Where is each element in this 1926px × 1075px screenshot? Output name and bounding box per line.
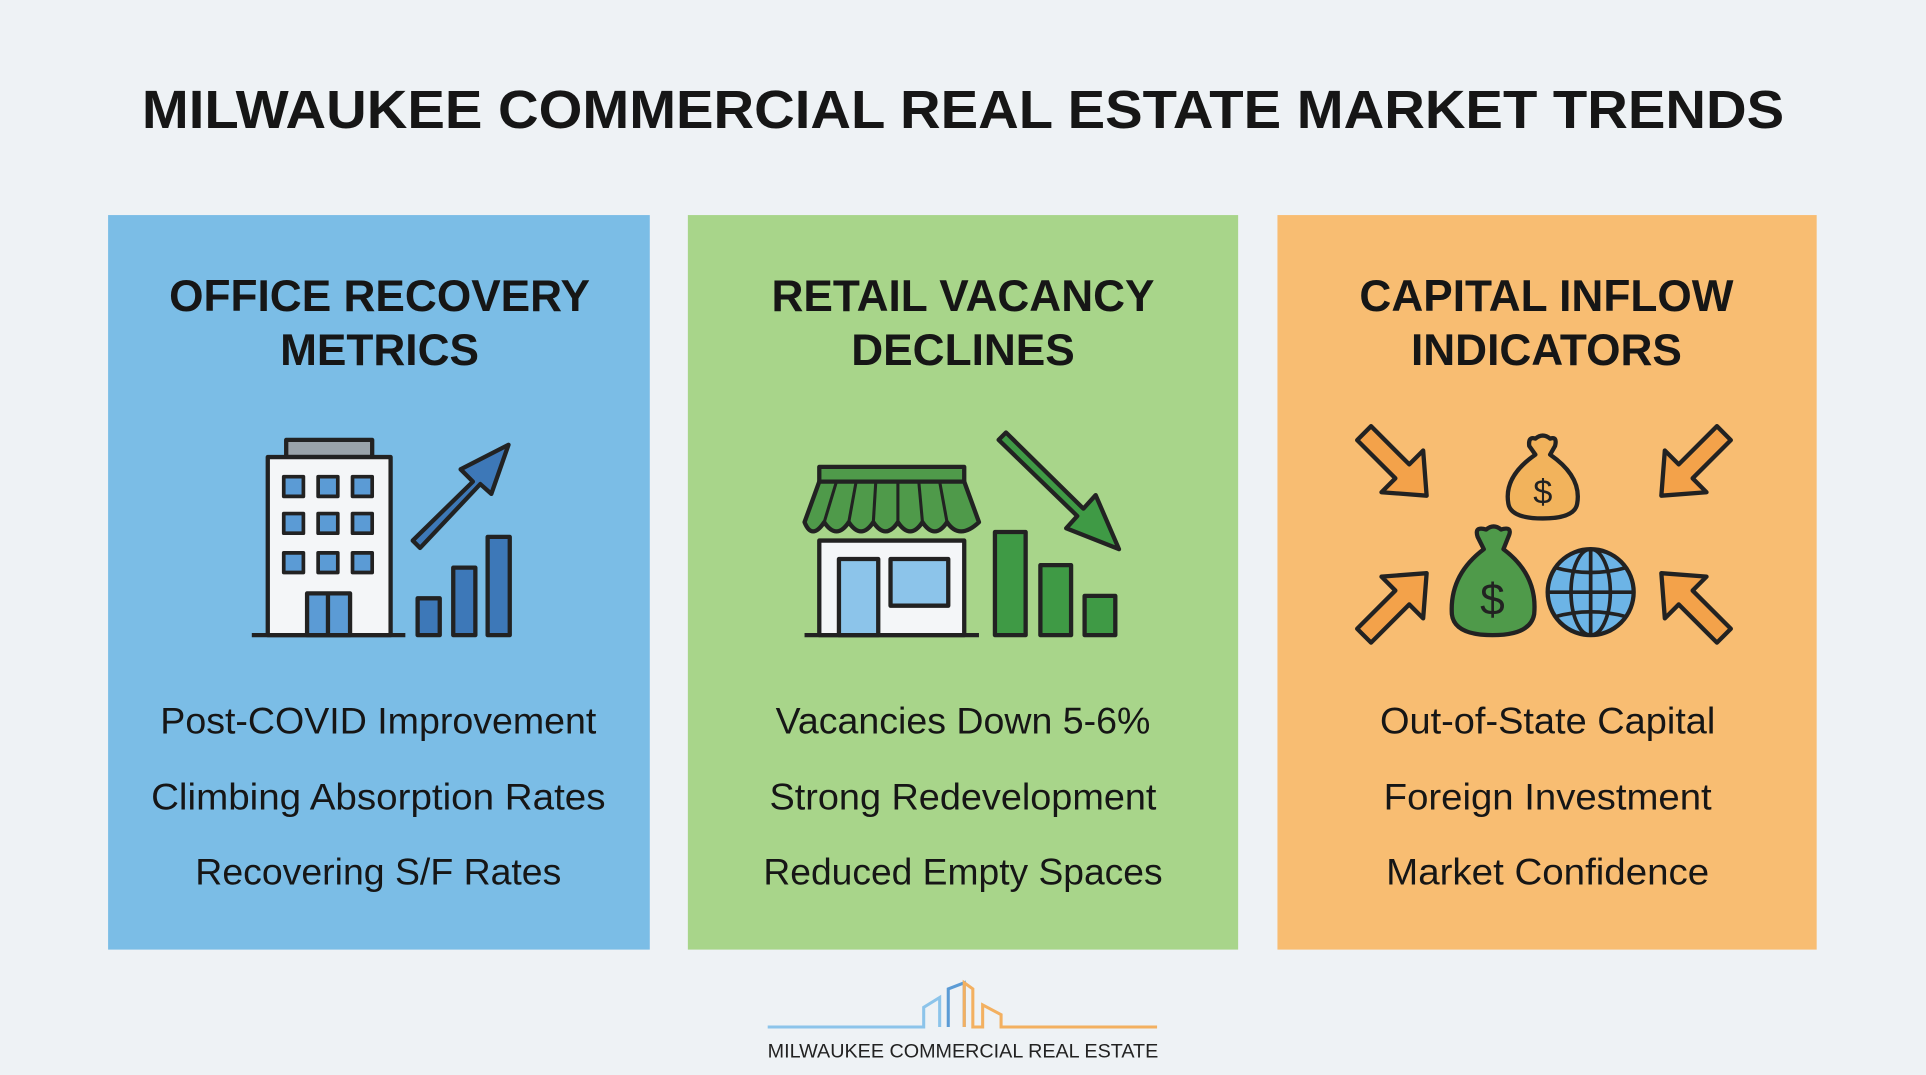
text: capital bullets: Foreign Investment (1384, 777, 1712, 818)
icon: storefront with falling chart (805, 432, 1119, 635)
footer logo (768, 983, 1158, 1063)
text: office bullets: Post-COVID Improvement (160, 700, 596, 741)
heading: capital (1359, 272, 1734, 375)
text: office bullets: Climbing Absorption Rates (151, 777, 606, 818)
panel: retail vacancy (688, 215, 1238, 950)
footer text: MILWAUKEE COMMERCIAL REAL ESTATE (768, 1041, 1158, 1063)
text: retail bullets: Vacancies Down 5-6% (776, 700, 1150, 741)
text: capital bullets (1380, 700, 1715, 892)
heading: capital: INDICATORS (1411, 326, 1682, 375)
heading: retail: DECLINES (851, 326, 1075, 375)
icon: converging arrows, money bags, globe: $ (1533, 474, 1552, 512)
text: capital bullets: Market Confidence (1386, 851, 1709, 892)
heading: office: METRICS (280, 326, 479, 375)
icon: building with rising chart (252, 440, 510, 635)
text: retail bullets: Strong Redevelopment (770, 777, 1156, 818)
text: office bullets (151, 700, 606, 892)
heading: retail: RETAIL VACANCY (771, 272, 1155, 321)
heading: office (169, 272, 590, 375)
panel: capital inflow (1277, 215, 1817, 950)
heading: retail (771, 272, 1155, 375)
text: office bullets: Recovering S/F Rates (195, 851, 561, 892)
text: capital bullets: Out-of-State Capital (1380, 700, 1715, 741)
heading: office: OFFICE RECOVERY (169, 272, 590, 321)
title: MILWAUKEE COMMERCIAL REAL ESTATE MARKET TRENDS (142, 80, 1784, 140)
text: retail bullets: Reduced Empty Spaces (763, 851, 1163, 892)
text: retail bullets (763, 700, 1163, 892)
panel: office recovery (108, 215, 650, 950)
icon: converging arrows, money bags, globe (1343, 412, 1745, 657)
icon: converging arrows, money bags, globe: $ (1480, 575, 1505, 624)
heading: capital: CAPITAL INFLOW (1359, 272, 1734, 321)
